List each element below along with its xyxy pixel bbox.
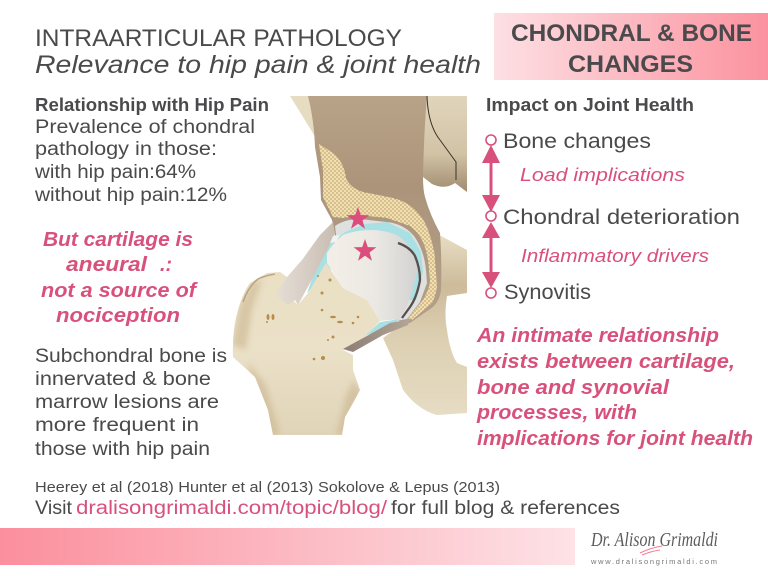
callout: cartilage is aneural: nociception bbox=[56, 305, 180, 327]
text block: impact chain: Bone changes bbox=[503, 130, 651, 153]
title: INTRAARTICULAR PATHOLOGY bbox=[35, 25, 402, 52]
text block: relationship with hip pain bbox=[34, 95, 269, 206]
blog link line: dralisongrimaldi.com/topic/blog/ bbox=[76, 498, 388, 519]
title bbox=[35, 25, 481, 79]
text block: impact chain: Chondral deterioration bbox=[503, 206, 740, 229]
callout: intimate relationship: bone and synovial bbox=[477, 377, 669, 399]
text block: relationship with hip pain: without hip pain:12% bbox=[34, 185, 227, 206]
icon: femur bbox=[233, 263, 380, 435]
text block: impact chain: Synovitis bbox=[504, 281, 591, 304]
icon: node markers bbox=[486, 135, 496, 298]
title: Relevance to hip pain & joint health bbox=[35, 51, 481, 79]
callout: cartilage is aneural: But cartilage is bbox=[43, 229, 193, 251]
icon: cartilage wear line bbox=[398, 243, 420, 318]
callout: intimate relationship: An intimate relationship bbox=[476, 325, 719, 347]
icon: pelvis cross-section bbox=[308, 96, 441, 323]
text block: subchondral bone bbox=[35, 346, 227, 460]
icon: femoral cartilage bbox=[307, 222, 423, 300]
arrow: chondral deterioration to synovitis bbox=[482, 222, 500, 288]
text block: relationship with hip pain: Prevalence of chondral bbox=[35, 117, 255, 138]
arrow: bone changes to chondral deterioration bbox=[482, 145, 500, 212]
icon: upper ligament bbox=[275, 222, 335, 305]
banner: chondral and bone changes: CHONDRAL & BONE bbox=[511, 20, 752, 47]
callout: cartilage is aneural: .: bbox=[160, 254, 172, 276]
text block: impact chain bbox=[503, 130, 740, 304]
banner: chondral and bone changes bbox=[494, 13, 768, 80]
callout: intimate relationship: implications for joint health bbox=[477, 428, 753, 450]
callout: cartilage is aneural: aneural bbox=[66, 254, 147, 276]
icon: upper left ilium edge bbox=[290, 96, 320, 145]
footer bar bbox=[0, 528, 575, 565]
text block: relationship with hip pain: Relationship with Hip Pain bbox=[35, 95, 269, 115]
icon: pelvis fissure bbox=[427, 96, 456, 180]
text block: subchondral bone: those with hip pain bbox=[35, 439, 210, 460]
text block: impact chain: Load implications bbox=[520, 164, 685, 185]
blog link line: for full blog & references bbox=[391, 498, 620, 519]
blog link line: Visit bbox=[35, 498, 73, 519]
references: Heerey et al (2018) Hunter et al (2013) Sokolove & Lepus (2013) bbox=[35, 479, 500, 496]
icon: acetabular layer bbox=[335, 219, 427, 321]
callout: cartilage is aneural bbox=[41, 229, 199, 327]
text block: subchondral bone: Subchondral bone is bbox=[35, 346, 227, 367]
icon: lower pelvis bbox=[383, 230, 467, 415]
icon: star on femoral head bbox=[354, 239, 376, 261]
logo: Dr. Alison Grimaldi: Dr. Alison Grimaldi bbox=[590, 529, 718, 551]
callout: cartilage is aneural: not a source of bbox=[41, 280, 199, 302]
icon: star on subchondral bone bbox=[347, 207, 369, 229]
text block: relationship with hip pain: with hip pain:64% bbox=[34, 162, 196, 183]
icon: ligament edge bbox=[330, 235, 340, 243]
banner: chondral and bone changes: CHANGES bbox=[568, 51, 693, 78]
logo: Dr. Alison Grimaldi bbox=[590, 529, 718, 566]
icon: posterior pelvis bbox=[420, 96, 467, 192]
icon: lower capsule bbox=[343, 319, 410, 352]
icon: femoral head bbox=[327, 230, 417, 321]
icon: spongy subchondral bone bbox=[319, 144, 437, 320]
text block: subchondral bone: marrow lesions are bbox=[35, 392, 219, 413]
icon: trabecular detail bbox=[266, 275, 359, 360]
icon: lower cartilage bbox=[365, 319, 400, 336]
icon: greater trochanter edge bbox=[243, 274, 275, 302]
callout: intimate relationship bbox=[476, 325, 753, 450]
blog link line bbox=[35, 498, 620, 519]
heading: impact on joint health: Impact on Joint Health bbox=[486, 95, 694, 115]
logo: Dr. Alison Grimaldi: www.dralisongrimaldi.com bbox=[590, 557, 717, 566]
text block: relationship with hip pain: pathology in those: bbox=[35, 139, 217, 160]
hip joint illustration bbox=[232, 96, 467, 435]
icon: femur shading bbox=[232, 280, 365, 435]
callout: intimate relationship: processes, with bbox=[476, 402, 637, 424]
text block: impact chain: Inflammatory drivers bbox=[521, 246, 709, 266]
callout: intimate relationship: exists between cartilage, bbox=[477, 351, 735, 373]
text block: subchondral bone: more frequent in bbox=[35, 415, 199, 436]
text block: subchondral bone: innervated & bone bbox=[35, 369, 211, 390]
